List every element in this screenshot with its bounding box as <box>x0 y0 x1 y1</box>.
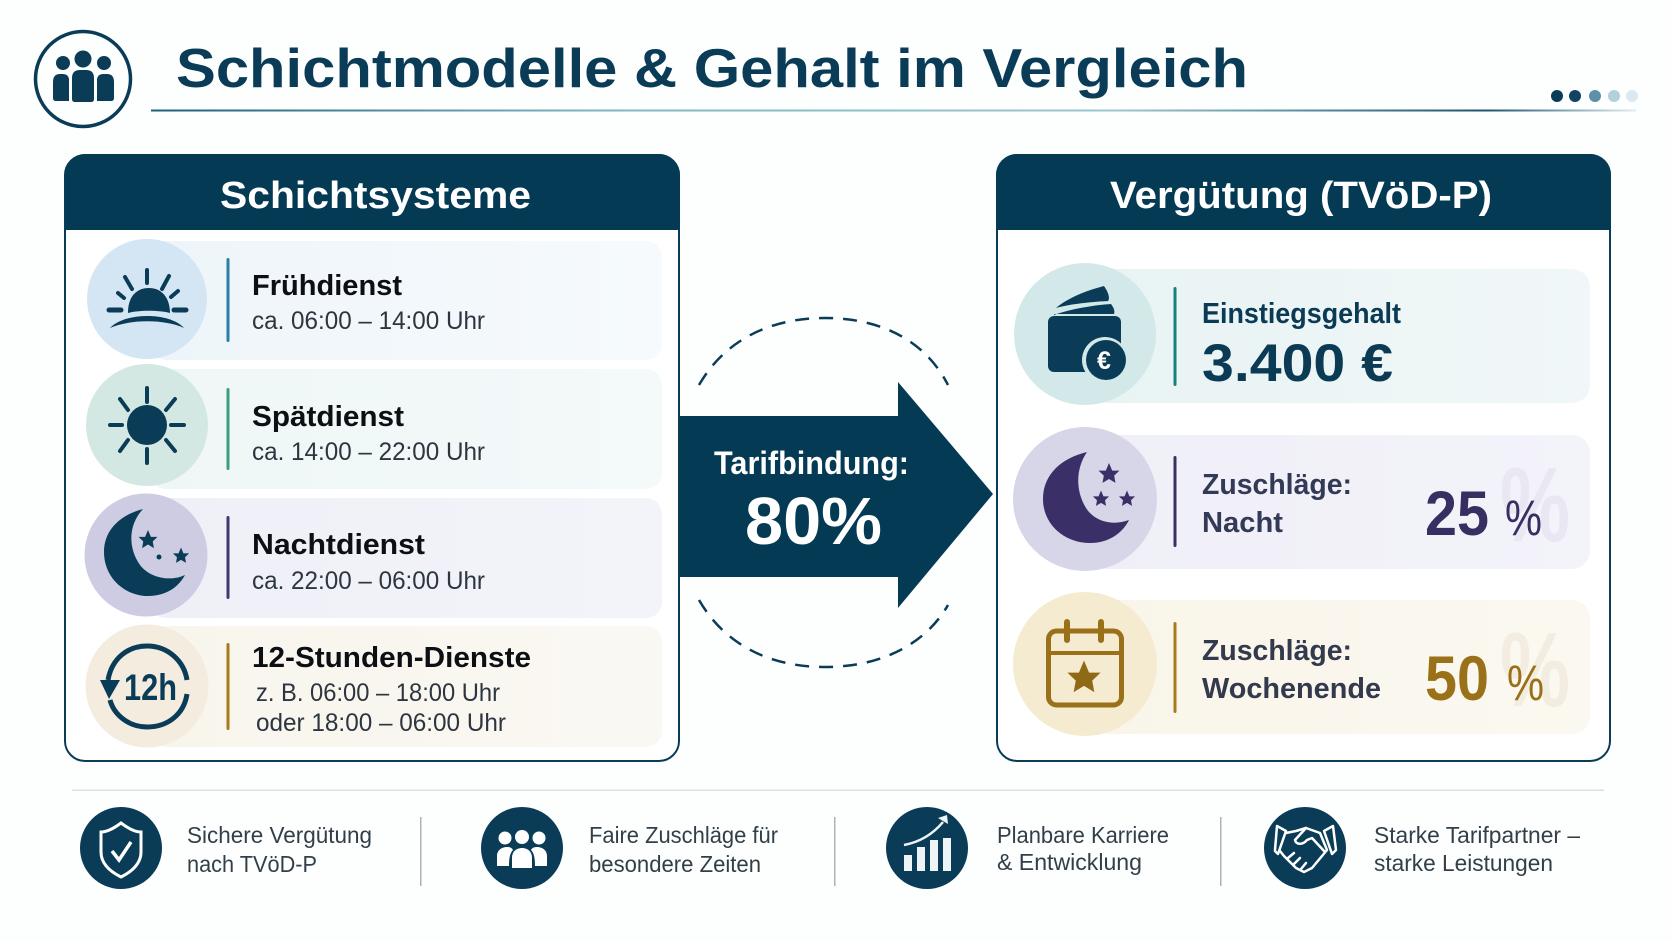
footer item: Planbare Karriere <box>886 807 1169 889</box>
central arrow <box>680 382 993 608</box>
row: Spätdienst <box>86 364 662 489</box>
dashed arc below arrow <box>699 600 948 667</box>
icon: growth chart <box>904 815 951 871</box>
row: Zuschläge Nacht <box>1013 427 1590 571</box>
row: Frühdienst: ca. 06:00 – 14:00 Uhr <box>252 307 485 335</box>
icon: wallet with euro coin: € <box>1097 347 1111 375</box>
panel heading bar <box>65 154 680 230</box>
panel: Schichtsysteme <box>65 154 680 761</box>
row: 12-Stunden-Dienste: z. B. 06:00 – 18:00 Uhr <box>256 679 500 707</box>
panel heading: Schichtsysteme <box>220 175 531 217</box>
panel body <box>997 155 1610 761</box>
panel heading bar <box>996 154 1611 230</box>
row: Zuschläge Wochenende <box>1013 592 1590 736</box>
icon: shield <box>101 823 141 877</box>
icon: wallet with euro coin <box>1048 286 1128 383</box>
icon: moon and stars <box>1043 452 1135 543</box>
row: Nachtdienst <box>84 494 662 618</box>
row: Zuschläge Nacht: Zuschläge: <box>1202 469 1352 501</box>
panel heading: Vergütung (TVöD-P) <box>1110 175 1492 217</box>
footer item: Sichere Vergütung: Sichere Vergütung <box>187 822 372 848</box>
icon: calendar with star <box>1048 622 1122 705</box>
header rule <box>151 110 1636 112</box>
row: Einstiegsgehalt: 3.400 € <box>1202 334 1393 393</box>
arrow value: 80% <box>745 484 882 559</box>
footer item: Faire Zuschläge: besondere Zeiten <box>589 851 761 877</box>
header <box>36 32 1638 126</box>
row: Zuschläge Nacht: Nacht <box>1202 507 1283 539</box>
icon: sunrise <box>109 270 186 328</box>
title: Schichtmodelle & Gehalt im Vergleich <box>176 37 1248 99</box>
panel body <box>65 155 679 761</box>
pagination dots <box>1551 90 1638 102</box>
row: Zuschläge Wochenende: % <box>1507 655 1544 711</box>
row: Frühdienst: Frühdienst <box>252 270 402 302</box>
row: 12-Stunden-Dienste: 12-Stunden-Dienste <box>252 642 531 674</box>
icon: 12h clock: 12h <box>124 667 177 708</box>
footer rule <box>72 790 1604 791</box>
row: Frühdienst <box>87 239 662 360</box>
footer item: Planbare Karriere: & Entwicklung <box>997 849 1142 875</box>
footer item: Planbare Karriere: Planbare Karriere <box>997 822 1169 848</box>
row: Zuschläge Wochenende: % <box>1500 611 1570 729</box>
footer item: Faire Zuschläge: Faire Zuschläge für <box>589 822 778 848</box>
icon: 12h clock <box>100 646 187 727</box>
icon: sun <box>110 388 184 463</box>
footer item: Faire Zuschläge <box>481 807 778 889</box>
row: Einstiegsgehalt <box>1014 263 1590 405</box>
row: Nachtdienst: Nachtdienst <box>252 529 425 561</box>
footer item: Starke Tarifpartner: starke Leistungen <box>1374 850 1553 876</box>
icon: people in circle <box>36 32 130 126</box>
row: Nachtdienst: ca. 22:00 – 06:00 Uhr <box>252 567 485 595</box>
footer item: Starke Tarifpartner <box>1264 807 1580 889</box>
panel: Vergütung <box>996 154 1611 761</box>
footer item: Sichere Vergütung: nach TVöD-P <box>187 851 317 877</box>
row: Spätdienst: Spätdienst <box>252 401 404 433</box>
footer item: Sichere Vergütung <box>80 807 372 889</box>
row: Zuschläge Nacht: % <box>1505 490 1542 546</box>
footer item: Starke Tarifpartner: Starke Tarifpartner – <box>1374 822 1580 848</box>
row: Zuschläge Nacht: % <box>1500 446 1570 564</box>
row: 12-Stunden-Dienste <box>86 624 662 748</box>
icon: handshake <box>1275 826 1336 872</box>
row: Einstiegsgehalt: Einstiegsgehalt <box>1202 298 1401 330</box>
icon: moon and stars <box>104 509 189 596</box>
icon: people <box>497 830 547 868</box>
arrow label: Tarifbindung: <box>714 445 909 481</box>
row: Spätdienst: ca. 14:00 – 22:00 Uhr <box>252 438 485 466</box>
row: 12-Stunden-Dienste: oder 18:00 – 06:00 Uhr <box>256 709 506 737</box>
dashed arc above arrow <box>699 318 948 385</box>
row: Zuschläge Wochenende: Wochenende <box>1202 673 1381 705</box>
row: Zuschläge Wochenende: 50 <box>1425 644 1489 714</box>
row: Zuschläge Nacht: 25 <box>1425 479 1489 549</box>
row: Zuschläge Wochenende: Zuschläge: <box>1202 635 1352 667</box>
